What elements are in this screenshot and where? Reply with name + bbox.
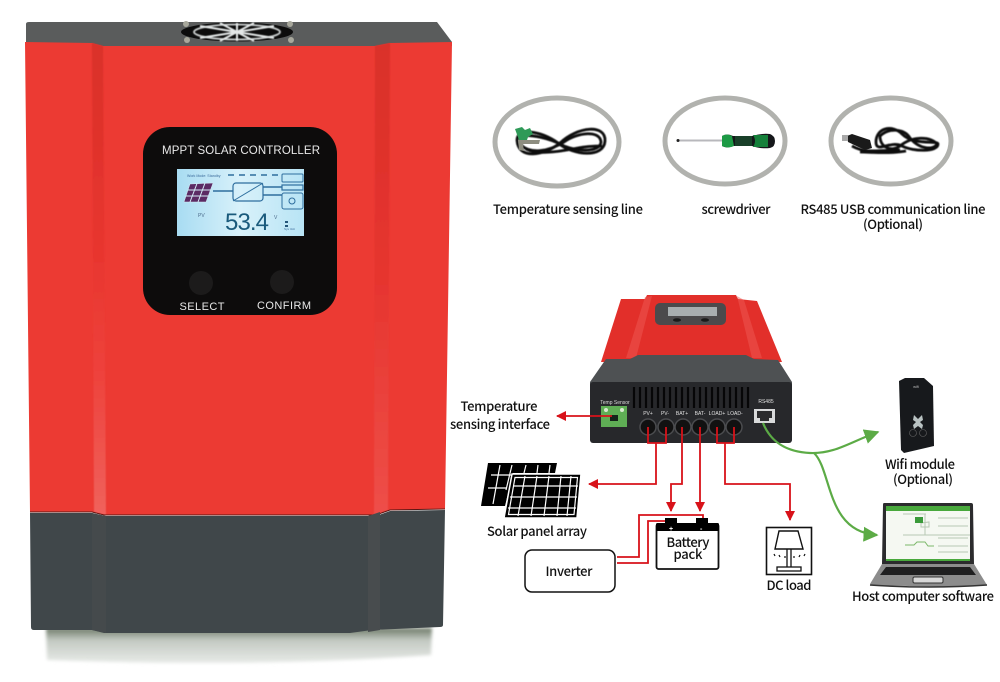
port labels: PV+ — [643, 411, 653, 417]
temperature sensing interface label: Temperature — [460, 396, 538, 415]
solar panel glyph — [184, 183, 213, 202]
temperature sensing interface label: sensing interface — [450, 414, 550, 433]
accessory: temperature sensing line — [493, 98, 643, 218]
label: DC load — [766, 575, 812, 594]
label: RS485 USB communication line — [800, 199, 986, 218]
solar panel array icon — [481, 463, 587, 540]
temperature sensor wire — [557, 415, 612, 417]
CONFIRM button — [257, 270, 311, 312]
inverter wire A — [617, 515, 703, 557]
accessory: screwdriver — [665, 98, 785, 218]
screwdriver tool — [676, 134, 775, 148]
inverter box — [525, 550, 615, 592]
RS485 port: RS485 — [758, 399, 774, 405]
line to wifi module — [763, 423, 878, 453]
label: Temperature sensing line — [493, 199, 643, 218]
mini display — [655, 303, 726, 325]
LCD screen: 53.4 — [225, 209, 269, 236]
rear panel — [590, 382, 792, 443]
port labels: BAT- — [695, 411, 706, 417]
floor shadow — [46, 628, 432, 663]
USB cable — [852, 128, 938, 153]
terminal ports — [640, 419, 742, 435]
red wiring arrows — [557, 416, 790, 563]
port labels — [643, 411, 743, 417]
inverter box: Inverter — [546, 561, 593, 580]
line to host computer — [814, 453, 877, 535]
PV wires to solar panels — [589, 427, 666, 484]
battery pack icon: + — [669, 526, 673, 533]
port labels: BAT+ — [676, 411, 688, 417]
RS485 port — [754, 399, 775, 423]
LCD screen: Work Mode: Standby — [187, 174, 221, 178]
wifi module: wifi — [913, 384, 919, 389]
LCD screen: V — [274, 215, 278, 221]
SELECT button — [180, 271, 225, 313]
battery pack icon — [656, 518, 719, 569]
label: Battery — [666, 532, 710, 551]
panel title: MPPT SOLAR CONTROLLER — [162, 145, 320, 157]
accessory: RS485 USB communication line: (Optional) — [863, 214, 923, 233]
label: Wifi module — [885, 454, 955, 473]
dark lower housing — [30, 510, 445, 633]
small controller rear view — [590, 295, 792, 443]
DC load lamp icon — [766, 528, 812, 594]
wifi module — [885, 378, 955, 488]
BAT+ wire — [671, 427, 682, 511]
LCD screen: PV — [198, 213, 205, 219]
label: Solar panel array — [487, 521, 587, 540]
temp sensor connector — [600, 400, 630, 427]
control panel — [143, 127, 337, 315]
wifi module: (Optional) — [893, 469, 953, 488]
red casing — [601, 295, 782, 362]
port labels: LOAD- — [727, 411, 743, 417]
temp sensor connector: Temp Sensor — [600, 400, 630, 406]
label: Host computer software — [852, 586, 994, 605]
shoulder — [590, 355, 792, 386]
port labels: PV- — [661, 411, 669, 417]
red housing — [25, 42, 452, 515]
SELECT button: SELECT — [180, 301, 225, 313]
LCD screen: Sys Volt — [284, 227, 295, 231]
BAT- wire — [699, 427, 701, 511]
vents — [634, 387, 748, 408]
inverter wire B — [617, 521, 666, 563]
laptop with host computer software — [852, 503, 994, 605]
load wires — [717, 427, 790, 520]
port labels: LOAD+ — [709, 411, 725, 417]
battery pack icon: pack — [674, 544, 703, 563]
green communication lines — [763, 423, 878, 535]
LCD screen — [177, 169, 304, 236]
top face with fan — [26, 21, 452, 46]
CONFIRM button: CONFIRM — [257, 300, 311, 312]
coiled cable — [517, 129, 605, 154]
battery pack icon: - — [700, 526, 703, 533]
accessory: RS485 USB communication line — [800, 98, 986, 233]
temperature sensing interface label — [450, 396, 550, 433]
main product: MPPT solar controller — [25, 21, 452, 663]
label: screwdriver — [702, 199, 771, 218]
